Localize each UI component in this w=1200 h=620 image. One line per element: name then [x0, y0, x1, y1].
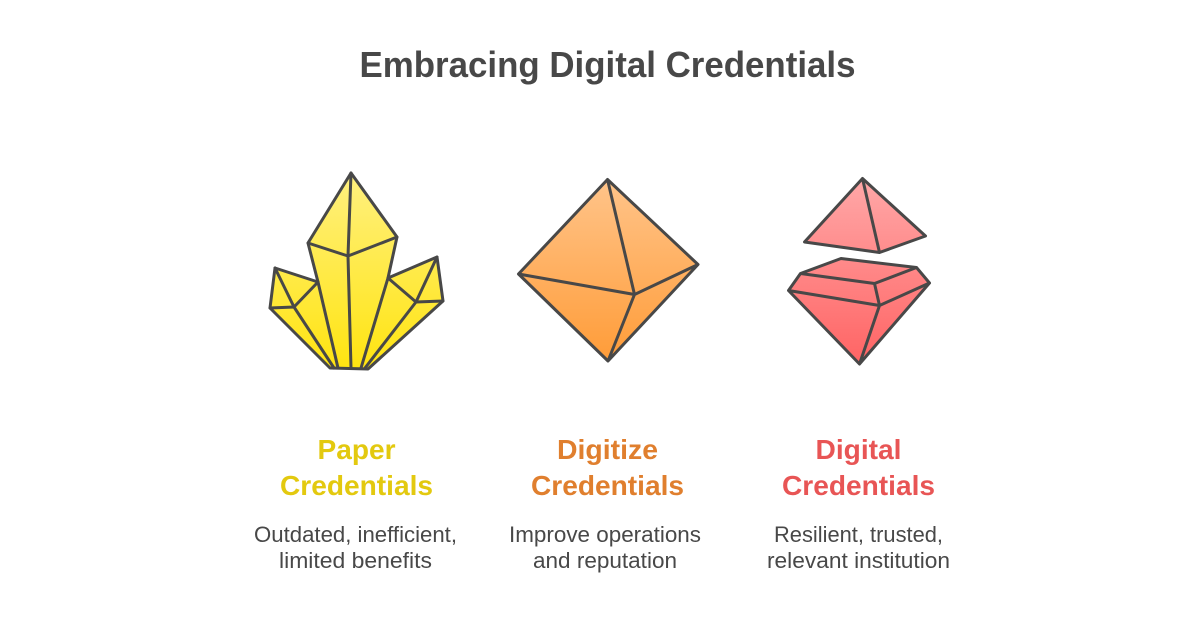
title: Embracing Digital Credentials	[360, 44, 856, 85]
text block: digital credentials description: relevant institution	[767, 548, 950, 573]
icon: yellow crystal cluster	[270, 173, 443, 369]
text block: paper credentials heading: Paper	[318, 434, 396, 465]
icon: red split diamond	[788, 178, 930, 364]
text block: paper credentials heading: Credentials	[280, 470, 433, 501]
text block: digital credentials description: Resilient, trusted,	[774, 522, 943, 547]
text block: paper credentials description	[254, 522, 457, 573]
text block: digitize credentials heading: Credentials	[531, 470, 684, 501]
text block: digital credentials heading	[782, 434, 935, 501]
text block: digitize credentials heading: Digitize	[557, 434, 658, 465]
text block: digital credentials heading: Digital	[816, 434, 902, 465]
icon: orange octahedron	[518, 180, 698, 361]
text block: paper credentials heading	[280, 434, 433, 501]
text block: digital credentials description	[767, 522, 950, 573]
text block: paper credentials description: limited benefits	[279, 548, 432, 573]
text block: digitize credentials description	[509, 522, 701, 573]
text block: digital credentials heading: Credentials	[782, 470, 935, 501]
text block: paper credentials description: Outdated, inefficient,	[254, 522, 457, 547]
text block: digitize credentials heading	[531, 434, 684, 501]
text block: digitize credentials description: Improve operations	[509, 522, 701, 547]
text block: digitize credentials description: and reputation	[533, 548, 677, 573]
